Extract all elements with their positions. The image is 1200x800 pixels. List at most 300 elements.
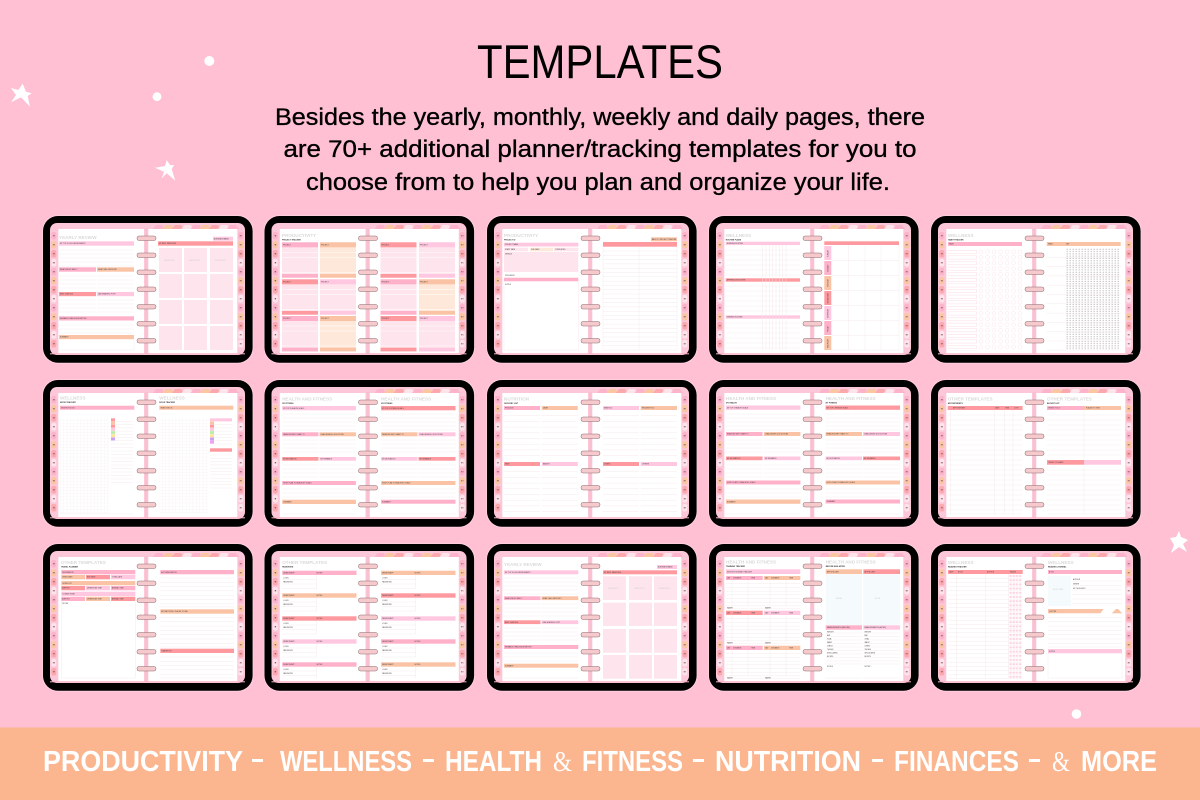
banner categories: PRODUCTIVITY: [43, 746, 243, 778]
left page: AFTERNOON ROUTINE: [727, 279, 746, 282]
right page: SHOULDERS: [827, 652, 838, 654]
right page: [381, 571, 456, 678]
left page: DAY: [765, 646, 769, 649]
right page: CHALLENGES & SOLUTIONS: [420, 433, 444, 436]
right page: PLACE PHOTO: [634, 587, 645, 590]
left page: DISTANCE: [771, 577, 780, 580]
left page: REASONS WHY I WANT TO: [727, 433, 749, 436]
left page: DATE: [995, 407, 1000, 410]
right page: AUTHOR: [1073, 578, 1081, 581]
right page: MY THOUGHTS: [1073, 588, 1086, 590]
tablet: wellness goals: [709, 380, 919, 527]
right page: [159, 396, 233, 513]
right page: MY FITNESS: [826, 402, 838, 404]
right page: [380, 242, 455, 351]
tablet frame: [43, 380, 253, 527]
tablet: project tracker: [264, 216, 474, 363]
left page: PROJECT: [283, 282, 291, 284]
right page: [158, 237, 233, 350]
right page: MOOD TRACKER: [159, 401, 176, 404]
left page: DISTANCE: [771, 611, 780, 614]
left page: TOTAL DAYS: [112, 576, 123, 579]
intro paragraph: Besides the yearly, monthly, weekly and daily pages, there: [275, 104, 925, 131]
right page: MY BEST MEMORIES: [159, 243, 177, 245]
left page: MORNING ROUTINE: [727, 243, 744, 245]
left page: PASSWORD: [283, 649, 294, 652]
left page: TIME: [751, 612, 756, 614]
left page: TIME: [789, 578, 794, 580]
left page: REASONS WHY I WANT TO: [283, 433, 306, 436]
right page: GOAL: [864, 638, 869, 640]
intro paragraph: are 70+ additional planner/tracking templates for you to: [284, 136, 916, 163]
right page: MY BEST MEMORIES: [604, 572, 622, 574]
left page: WEBSITE/APP: [283, 640, 296, 643]
left page: WELLNESS: [948, 560, 974, 565]
right page: BOOK COVER: [1053, 589, 1064, 591]
left page: BEST LESSONS: [60, 294, 74, 296]
left page: DISTANCE: [771, 646, 780, 649]
left page: TIME: [789, 647, 794, 649]
banner categories: HEALTH: [445, 746, 542, 778]
right page: THINGS TO DO: [1048, 408, 1061, 410]
right page: HEALTH AND FITNESS: [826, 396, 876, 401]
right page: REASONS WHY I WANT TO: [827, 433, 849, 436]
left page: NOTES: [505, 284, 512, 286]
left page: WATER: [765, 641, 772, 644]
left page: PASSWORD: [283, 603, 294, 606]
right page: PLACE PHOTO: [659, 587, 670, 590]
right page: MY MOTIVATION: [382, 458, 396, 460]
right page: BMI: [827, 635, 831, 637]
left page: TIME: [751, 647, 756, 649]
left page: WHAT CAN I IMPROVE?: [542, 597, 562, 600]
left page: DAIRY: [543, 407, 549, 410]
left page: DAY: [765, 611, 769, 614]
left page: START DATE: [62, 576, 73, 579]
left page: COMPLETED: [555, 249, 566, 251]
right page: WAIST: [827, 641, 832, 644]
right page: PLACE PHOTO: [164, 259, 175, 262]
tablet frame: [43, 216, 253, 363]
left page: DAY: [727, 577, 731, 580]
left page: WHAT CAN I IMPROVE?: [98, 268, 117, 271]
right page: MY REWARDS: [864, 457, 876, 460]
left page: HABIT TRACKER: [948, 238, 964, 242]
left page: YEARLY REVIEW: [59, 235, 97, 240]
left page: [60, 396, 134, 514]
tablet frame: [264, 380, 474, 527]
right page: WEIGHT: [827, 632, 834, 634]
right page: WAIST: [864, 641, 870, 644]
left page: LOGIN: [283, 623, 289, 625]
left page: LOGIN: [283, 578, 289, 580]
right page: PASSWORD: [382, 580, 393, 584]
right page: BEFORE AND AFTER: [826, 565, 846, 568]
left page: MY MOTIVATION: [727, 457, 741, 460]
right page: BUCKET LIST: [1047, 403, 1060, 405]
right page: MY TOP 5 FITNESS GOALS: [382, 407, 405, 410]
banner categories: FINANCES: [894, 746, 1019, 778]
right page: WEBSITE/APP: [382, 617, 394, 620]
right page: MY REWARDS: [420, 458, 432, 460]
right page: HABIT: [1048, 243, 1053, 246]
left page: WEBSITE/APP: [283, 617, 296, 620]
right page: [603, 565, 677, 679]
intro paragraph: choose from to help you plan and organize your life.: [306, 169, 890, 196]
right page: PASSWORD: [382, 603, 393, 606]
tablet: nutrition: [487, 380, 697, 527]
left page: MY TOP 5 HEALTH GOALS: [283, 407, 305, 410]
left page: OTHER TEMPLATES: [948, 396, 993, 402]
left page: PROGRESS: [505, 275, 515, 277]
tablet: routine plans: [709, 216, 919, 363]
left page: NOTES: [316, 664, 323, 666]
right page: WEIGHT: [864, 632, 871, 634]
left page: PASSWORD: [283, 626, 294, 629]
right page: MY FITNESS: [381, 403, 393, 405]
right page: [1048, 560, 1123, 678]
right page: LOGIN: [382, 646, 388, 648]
right page: YEARLY MOOD: [160, 406, 173, 409]
left page: ARRIVAL TIME: [112, 597, 124, 600]
left page: WATER: [765, 606, 772, 609]
left page: EVENING ROUTINE: [727, 317, 743, 319]
banner categories: [43, 746, 1157, 778]
left page: TIME: [789, 612, 794, 614]
left page: AIRPORT: [62, 597, 70, 600]
left page: AUTHOR: [987, 571, 995, 574]
left page: DAY: [765, 577, 769, 580]
banner categories: MORE: [1081, 746, 1157, 778]
tablet frame: [931, 380, 1141, 527]
left page: PROJECT: [283, 244, 291, 246]
left page: [282, 233, 356, 351]
right page: WEDNESDAY: [826, 292, 829, 304]
right page: BMI: [864, 635, 868, 637]
right page: LOGIN: [382, 578, 388, 580]
left page: [948, 233, 1023, 351]
right page: THIGHS: [827, 649, 834, 651]
left page: START DATE: [505, 248, 516, 251]
right page: PASSWORD: [382, 672, 393, 675]
banner categories: WELLNESS: [280, 746, 412, 778]
left page: WHAT WE DID WELL?: [60, 268, 77, 271]
left page: PROJECT: [283, 318, 291, 320]
left page: MY REWARDS: [765, 457, 777, 460]
right page: DAY: [1066, 243, 1070, 246]
right page: PLACE PHOTO: [215, 259, 226, 262]
right page: SUMMARY: [382, 500, 392, 503]
right page: BICEPS: [827, 656, 834, 658]
right page: FROZEN FOOD: [642, 408, 655, 410]
left page: PROJECT: [321, 244, 329, 246]
tablet: habit tracker: [931, 216, 1141, 363]
left page: SUMMARY: [60, 336, 69, 339]
right page: QUOTES: [1049, 611, 1057, 613]
tablet: running tracker and before after: [709, 544, 919, 691]
left page: MEAT: [505, 463, 510, 466]
left page: BAKERY: [543, 463, 551, 466]
right page: GENRE: [1073, 584, 1080, 586]
right page: ATTRACTIONS / PLACES TO SEE: [161, 610, 189, 613]
right page: [603, 406, 677, 512]
right page: REASONS WHY I WANT TO: [382, 433, 404, 436]
right page: READING JOURNAL: [1048, 566, 1067, 568]
right page: NOTES: [414, 572, 421, 574]
left page: DEPARTURE TIME: [87, 587, 103, 590]
right page: NOTES: [414, 618, 421, 620]
tablet frame: [264, 216, 474, 363]
right page: PROJECT: [420, 282, 428, 284]
tablet frame: [487, 544, 697, 691]
right page: TRANSPORT: [161, 650, 172, 652]
tablet: yearly review: [43, 216, 253, 363]
right page: [826, 396, 900, 514]
right page: PROJECT: [420, 244, 428, 246]
tablet: appointments: [931, 380, 1141, 527]
left page: WATER: [765, 676, 772, 679]
left page: DESTINATION: [62, 571, 74, 574]
left page: HEALTH AND FITNESS: [726, 560, 776, 564]
left page: MY TOP 5 HEALTH GOALS: [727, 406, 749, 409]
right page: BOOK: [1049, 572, 1055, 574]
left page: WELLNESS: [726, 233, 751, 238]
left page: NOTES: [62, 603, 69, 605]
right page: [160, 570, 234, 678]
right page: PLACES TO VISIT: [1086, 407, 1100, 410]
right page: FRIDAY: [826, 325, 829, 332]
left page: MY HEALTH: [726, 402, 737, 404]
left page: [282, 396, 356, 514]
left page: HEALTH AND FITNESS: [726, 396, 776, 401]
right page: MY TOP 5 FITNESS GOALS: [827, 406, 849, 409]
right page: WEBSITE/APP: [382, 572, 394, 574]
tablet frame: [709, 544, 919, 691]
left page: WELLNESS: [60, 396, 86, 400]
left page: CHALLENGES & SOLUTIONS: [765, 433, 789, 436]
right page: NOTES: [827, 666, 834, 668]
right page: OTHERS: [642, 464, 650, 466]
left page: DAY: [727, 646, 731, 649]
right page: WEBSITE/APP: [382, 640, 394, 643]
right page: WELLNESS: [1048, 560, 1074, 565]
left page: MY TOP 10 GOLDEN MOMENTS: [505, 572, 531, 574]
tablet: passwords and notes: [264, 544, 474, 691]
left page: DISTANCE: [733, 611, 742, 614]
left page: [726, 396, 800, 514]
left page: DEPARTURE TIME: [87, 597, 103, 600]
left page: HOW I PLAN TO REACH MY GOALS: [283, 482, 312, 485]
right page: WEBSITE/APP: [382, 663, 394, 666]
right page: CHEST: [864, 646, 870, 648]
left page: [726, 560, 800, 679]
tablet frame: [487, 216, 697, 363]
left page: [726, 233, 800, 350]
title: TEMPLATES: [477, 35, 723, 88]
bottom banner: [0, 728, 1200, 800]
left page: NUTRITION: [504, 396, 530, 402]
left page: LOGIN: [283, 600, 289, 602]
left page: DISTANCE: [733, 646, 742, 649]
left page: DUE DATE: [531, 248, 540, 251]
right page: BICEPS: [864, 656, 872, 658]
tablet frame: [709, 380, 919, 527]
right page: SUNDAY: [826, 249, 829, 257]
left page: HEALTH AND FITNESS: [282, 396, 332, 402]
banner categories: FITNESS: [582, 746, 683, 778]
left page: TRAVEL PLANNER: [61, 566, 79, 568]
right page: PROJECT: [382, 282, 389, 284]
left page: LOGIN: [283, 646, 289, 648]
right page: NOTES: [864, 666, 871, 668]
left page: MOOD TRACKER: [60, 401, 76, 404]
left page: APPOINTMENTS: [948, 402, 963, 405]
right page: BEFORE: [836, 598, 842, 600]
left page: PRODUCTIVITY: [282, 233, 316, 238]
left page: PROJECT TRACKER: [282, 238, 301, 242]
left page: RATING: [1010, 571, 1017, 574]
right page: SEAFOOD: [604, 407, 613, 410]
left page: WELLNESS: [948, 233, 974, 238]
right page: BLESSINGS BANK: [658, 566, 674, 569]
tablet: project id: [487, 216, 697, 363]
right page: HOW I PLAN TO REACH MY GOALS: [382, 482, 411, 485]
right page: NOTES: [414, 641, 421, 643]
right page: MEASUREMENTS (BEFORE): [827, 626, 850, 629]
left page: SUMMARY: [727, 500, 736, 503]
right page: LOGIN: [382, 669, 388, 671]
left page: HABIT: [949, 243, 954, 246]
right page: PLACE PHOTO: [189, 259, 200, 262]
right page: AFTER: [875, 597, 881, 600]
left page: [504, 233, 578, 350]
right page: HEALTH AND FITNESS: [381, 396, 431, 402]
left page: MY MOTIVATION: [283, 458, 297, 460]
tablet: travel planner: [43, 544, 253, 691]
left page: [282, 560, 356, 678]
right page: SUMMARY: [827, 500, 836, 503]
left page: [948, 560, 1023, 678]
left page: MY FITNESS: [282, 403, 294, 405]
left page: ROUTINE PLANS: [726, 238, 742, 242]
left page: NOTES: [316, 572, 323, 574]
right page: SHOULDERS: [864, 652, 876, 654]
left page: MONTHLY RUNNING TRACKER: [727, 570, 753, 573]
right page: TUESDAY: [826, 278, 829, 287]
left page: OTHER TEMPLATES: [61, 560, 106, 565]
right page: BACK TO PROJECT TRACKER: [652, 238, 677, 241]
left page: APPOINTMENT: [953, 407, 965, 410]
left page: DATE: [949, 571, 954, 574]
right page: HEALTH AND FITNESS: [826, 560, 876, 564]
left page: WATER: [727, 676, 734, 679]
right page: WEBSITE/APP: [382, 594, 394, 597]
left page: MY REWARDS: [320, 458, 333, 460]
right page: CHEST: [827, 646, 833, 648]
right page: MEASUREMENTS (AFTER): [864, 626, 886, 629]
left page: TIME: [751, 578, 756, 580]
banner categories: &: [1052, 746, 1070, 778]
left page: [59, 235, 134, 350]
left page: SUMMARY: [283, 500, 293, 504]
left page: TRAINING TRACKER: [726, 565, 746, 568]
right page: [824, 241, 899, 350]
left page: OTHER TEMPLATES: [282, 560, 327, 565]
right page: GOAL: [827, 638, 832, 640]
left page: PROJECT ID: [504, 240, 516, 242]
right page: PASSWORD: [382, 626, 393, 629]
right page: SATURDAY: [826, 338, 829, 348]
left page: WEBSITE/APP: [283, 663, 296, 666]
tablet: reading tracker and journal: [931, 544, 1141, 691]
tablet frame: [264, 544, 474, 691]
left page: ARRIVAL TIME: [112, 587, 124, 590]
right page: WELLNESS: [159, 396, 185, 400]
right page: PROJECT: [382, 318, 389, 320]
right page: [381, 396, 456, 514]
right page: LOGIN: [382, 623, 388, 625]
left page: GOING OUT: [62, 583, 72, 585]
right page: PLACE PHOTO: [608, 587, 619, 590]
left page: NOTES: [316, 595, 323, 597]
right page: CHALLENGES & SOLUTIONS: [864, 433, 888, 436]
left page: END DATE: [87, 576, 96, 579]
right page: THINGS TO LEARN: [1048, 461, 1064, 464]
left page: WATER: [727, 641, 734, 644]
tablet frame: [709, 216, 919, 363]
right page: ACCOMMODATION: [161, 571, 177, 574]
left page: SUMMARY: [505, 664, 514, 667]
tablet frame: [487, 380, 697, 527]
right page: NOTES: [1049, 651, 1056, 653]
right page: THIGHS: [864, 649, 872, 651]
left page: PROJECT NAME: [505, 243, 519, 246]
right page: PASSWORD: [382, 649, 393, 652]
left page: LOGIN: [283, 669, 289, 671]
left page: TIME: [1005, 408, 1010, 410]
right page: PROJECT: [382, 244, 389, 246]
left page: CHALLENGES & SOLUTIONS: [320, 433, 345, 436]
right page: [603, 237, 677, 350]
right page: LOGIN: [382, 600, 388, 602]
left page: BOOK: [958, 572, 964, 574]
right page: HOW I PLAN TO REACH MY GOALS: [827, 481, 856, 484]
left page: PROJECT: [321, 282, 329, 284]
left page: PRODUCE: [505, 408, 514, 410]
left page: DETAILS: [505, 252, 513, 256]
left page: HOW I PLAN TO REACH MY GOALS: [727, 481, 756, 484]
right page: [1047, 242, 1121, 350]
left page: PASSWORD: [283, 580, 294, 584]
intro paragraph: [275, 104, 925, 196]
tablet frame: [931, 544, 1141, 691]
left page: BEST LESSONS: [505, 622, 519, 624]
right page: NOTES: [414, 664, 421, 666]
left page: PROJECT: [321, 318, 329, 320]
right page: BLESSINGS BANK: [214, 237, 230, 240]
left page: NOTES: [316, 618, 323, 620]
left page: I AM GRATEFUL FOR?: [98, 293, 116, 296]
left page: REWARDS THAN KNOW BETTER: [505, 646, 532, 649]
right page: THURSDAY: [826, 308, 829, 318]
left page: WEBSITE/APP: [283, 594, 296, 597]
left page: [504, 396, 578, 512]
right page: OTHER TEMPLATES: [1047, 396, 1092, 402]
left page: DISTANCE: [733, 577, 742, 580]
left page: PASSWORD: [282, 566, 294, 568]
tablet: yearly review variant: [487, 544, 697, 691]
left page: YEARLY REVIEW: [504, 562, 542, 567]
